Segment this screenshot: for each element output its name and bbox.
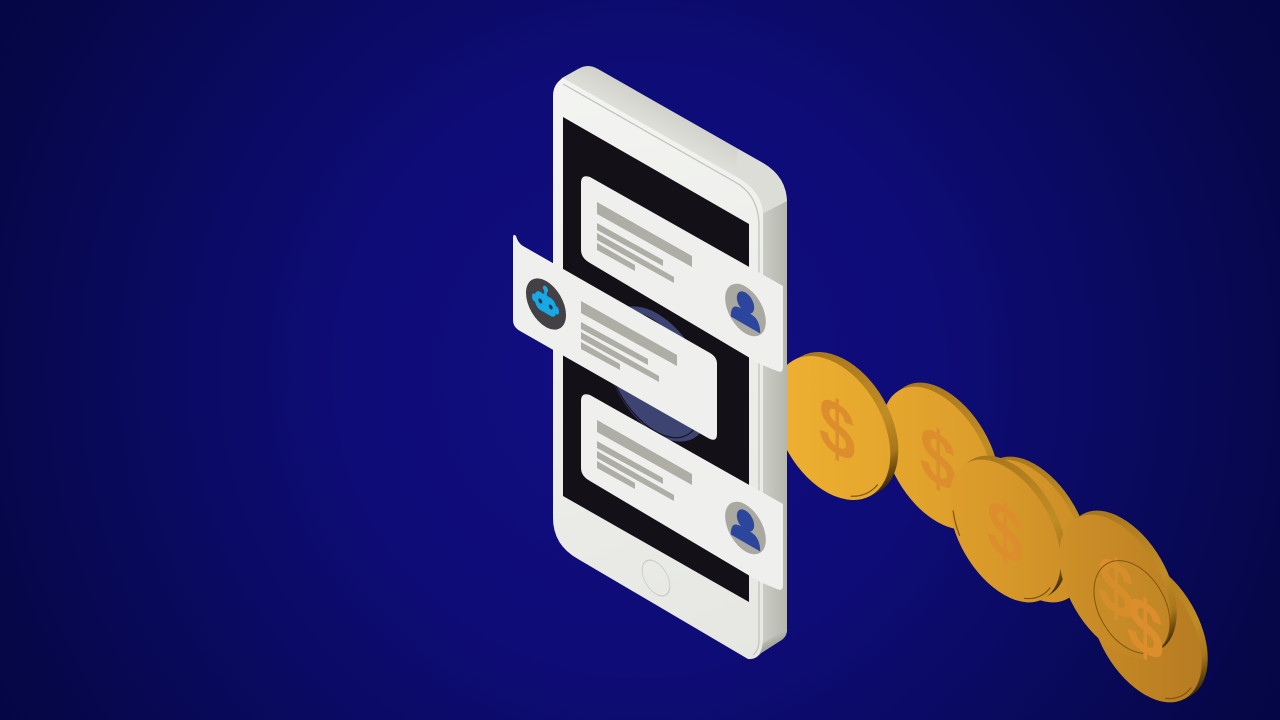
center glow disc — [583, 288, 731, 460]
phone — [553, 66, 787, 659]
icon: user avatar — [725, 493, 766, 563]
phone edge lines — [563, 84, 759, 655]
message card bot — [513, 235, 717, 440]
coin overlap ring and dollar — [1078, 547, 1186, 682]
phone side and top — [553, 66, 787, 400]
phone top corner highlight — [735, 149, 787, 214]
icon: robot avatar — [518, 272, 574, 336]
coin 3: $ — [987, 479, 1023, 586]
text lines — [597, 202, 692, 283]
coin 5 — [1036, 491, 1200, 677]
coin 2 — [859, 363, 1023, 549]
message card bottom — [581, 394, 783, 590]
phone right side — [758, 201, 787, 655]
phone front face — [553, 78, 763, 659]
coin 1 — [750, 331, 922, 521]
coins trail — [750, 331, 1231, 720]
coin 5: $ — [1098, 535, 1134, 642]
icon: user avatar — [725, 275, 766, 345]
coin 3 — [926, 436, 1090, 622]
coin 4 — [950, 437, 1113, 622]
home button — [642, 554, 670, 602]
screen — [563, 117, 749, 602]
coin 2: $ — [920, 406, 956, 513]
coin 1: $ — [819, 376, 855, 483]
text lines — [581, 301, 677, 382]
phone bottom sliver — [748, 629, 787, 659]
coin 6 — [1067, 537, 1231, 720]
coin overlap ring and dollar: $ — [1127, 575, 1163, 682]
text lines — [597, 420, 692, 501]
message card top — [581, 176, 783, 372]
